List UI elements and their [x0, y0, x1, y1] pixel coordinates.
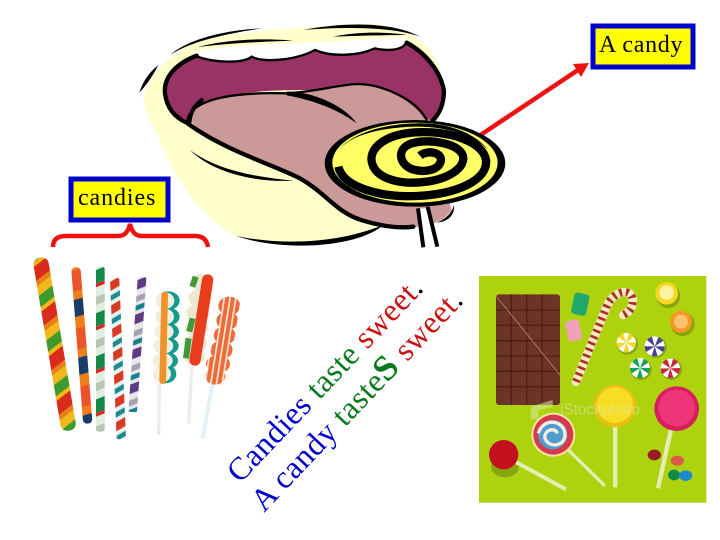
brace: groups the candies: [53, 224, 208, 247]
round striped sweets: [617, 333, 682, 380]
red lollipop: [489, 440, 566, 489]
rotated sentence: Candies taste sweet.: Candies taste sweet.: [219, 269, 430, 489]
watermark: iStockphoto: [560, 402, 640, 419]
label: candies: [71, 179, 168, 220]
lollipop 6: orange and teal: [153, 291, 180, 435]
lollipop stick: [417, 207, 437, 247]
candy stick 5: [128, 277, 146, 412]
illustration: group of candies: [32, 256, 240, 439]
pink lollipop: [654, 386, 699, 488]
candy stick 3: [96, 266, 105, 432]
candy stick 4: [110, 278, 126, 439]
small sweets: [648, 450, 692, 481]
lollipop 7: red and green: [183, 274, 212, 423]
illustration: candy assortment on green panel: [479, 276, 706, 503]
illustration: open mouth with tongue: [139, 24, 454, 246]
candy stick 2: [71, 267, 92, 424]
label: A candy: A candy: [599, 32, 683, 58]
chocolate bar: [496, 294, 560, 405]
yellow lollipop: [594, 385, 636, 487]
candy cane: [576, 292, 633, 382]
watermark: [531, 400, 640, 419]
gummy bears: [565, 292, 590, 342]
swirl lollipop: [531, 413, 605, 486]
green background panel: [479, 276, 706, 503]
orange slice: [670, 311, 695, 336]
tongue: [188, 85, 452, 227]
illustration: spiral lollipop: [325, 120, 505, 247]
arrow: lollipop to A candy label: [473, 63, 589, 140]
label: A candy: [593, 26, 693, 67]
rotated sentence: A candy tastes sweet.: A candy tasteS sweet.: [241, 279, 471, 519]
label: candies: candies: [78, 185, 156, 211]
candy stick 1: [32, 256, 77, 432]
lemon slice: [655, 282, 680, 308]
lollipop 8: orange stripes: [203, 297, 240, 438]
